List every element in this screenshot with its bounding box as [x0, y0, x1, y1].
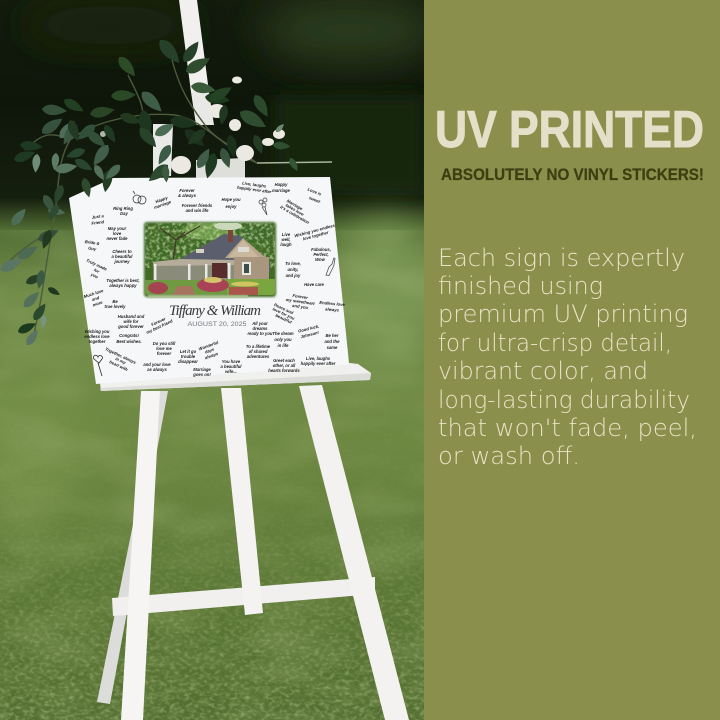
easel: upper mast and ledge behind the sign: [153, 0, 245, 178]
subheading: ABSOLUTELY NO VINYL STICKERS!: [441, 166, 704, 184]
handwritten guest notes: left side: Best wishes.: [116, 339, 142, 344]
handwritten guest notes: left side: good forever: [117, 324, 144, 329]
handwritten guest notes: left side: disappear: [178, 359, 198, 364]
handwritten guest notes: right side: All your: [251, 321, 268, 326]
handwritten guest notes: left side: Congrats!: [119, 333, 139, 338]
garland stems: [2, 60, 257, 338]
handwritten guest notes: right side: Wishing you endless: [294, 223, 336, 238]
handwritten guest notes: left side: Bride &: [84, 239, 100, 246]
handwritten guest notes: left side: Much love: [83, 288, 105, 299]
handwritten guest notes: right side: Wow: [315, 257, 326, 262]
handwritten guest notes: left side: never fade: [107, 236, 128, 241]
handwritten guest notes: left side: Let it go: [180, 349, 197, 354]
icon: heart key: [94, 355, 102, 376]
handwritten guest notes: right side: happily ever after: [237, 185, 272, 194]
handwritten guest notes: left side: my best friend: [145, 318, 174, 335]
handwritten guest notes: left side: and win life: [186, 208, 209, 213]
handwritten guest notes: left side: Marriage: [193, 367, 211, 372]
handwritten guest notes: right side: Forever: [292, 293, 309, 300]
handwritten guest notes: right side: only you: [274, 337, 292, 342]
body text: finished using: [438, 272, 603, 300]
white flowers: [100, 76, 285, 174]
greenery garland with white flowers: [0, 36, 332, 347]
handwritten guest notes: right side: [198, 180, 346, 374]
handwritten guest notes: left side: marriage: [153, 199, 172, 210]
handwritten guest notes: left side: as always: [147, 367, 167, 372]
handwritten guest notes: right side: Good luck,: [298, 324, 320, 334]
handwritten guest notes: right side: and you: [292, 303, 309, 310]
handwritten guest notes: right side: ready to you: [248, 331, 273, 336]
handwritten guest notes: right side: love for you: [272, 306, 296, 321]
handwritten guest notes: right side: Happy: [275, 182, 288, 187]
sign board: [69, 177, 359, 384]
handwritten guest notes: right side: Johnson!: [300, 330, 320, 339]
handwritten guest notes: right side: love together: [302, 230, 329, 241]
easel: centre leg: [221, 388, 263, 615]
handwritten guest notes: right side: To love,: [285, 261, 301, 266]
handwritten guest notes: right side: Wonderful: [198, 339, 220, 351]
handwritten guest notes: left side: Truly made: [85, 258, 108, 272]
handwritten guest notes: right side: laugh: [280, 242, 292, 247]
handwritten guest notes: left side: goes on!: [192, 372, 211, 377]
handwritten guest notes: right side: Hope you: [221, 197, 241, 202]
handwritten guest notes: right side: same: [327, 345, 338, 350]
handwritten guest notes: right side: marriage: [272, 188, 291, 193]
handwritten guest notes: left side: Day: [120, 211, 129, 216]
handwritten guest notes: right side: takes love: [285, 202, 305, 217]
body text: that won't fade, peel,: [438, 414, 697, 442]
handwritten guest notes: right side: beautiful: [275, 313, 293, 325]
handwritten guest notes: right side: Be her: [325, 333, 339, 338]
handwritten guest notes: left side: [83, 188, 213, 377]
handwritten guest notes: left side: endless love: [84, 334, 110, 339]
handwritten guest notes: left side: trouble: [181, 354, 196, 359]
handwritten guest notes: left side: you: [89, 271, 99, 280]
handwritten guest notes: left side: Forever: [150, 316, 167, 327]
handwritten guest notes: left side: Together, always: [104, 346, 138, 365]
handwritten guest notes: left side: in my: [115, 356, 127, 366]
panel: olive text column: [424, 0, 720, 720]
handwritten guest notes: right side: Peace and: [273, 302, 294, 315]
handwritten guest notes: left side: Happy: [155, 195, 169, 204]
handwritten guest notes: left side: Ring Ring: [113, 206, 133, 211]
handwritten guest notes: left side: wife for: [124, 319, 139, 324]
handwritten guest notes: right side: enjoy: [226, 204, 237, 209]
handwritten guest notes: left side: Together is best,: [106, 278, 140, 283]
easel: right leg: [299, 385, 409, 720]
handwritten guest notes: right side: days: [204, 346, 215, 355]
handwritten guest notes: right side: a beautiful: [221, 364, 242, 369]
handwritten guest notes: right side: Fabulous,: [311, 247, 331, 252]
body text: [438, 244, 697, 470]
handwritten guest notes: left side: Just a: [91, 213, 105, 220]
handwritten guest notes: left side: and your love: [143, 362, 171, 367]
easel: sign tray: [100, 364, 371, 391]
handwritten guest notes: right side: always: [204, 351, 219, 360]
handwritten guest notes: left side: May your: [108, 226, 127, 231]
handwritten guest notes: left side: Cheers to: [112, 249, 132, 254]
handwritten guest notes: right side: and joy: [286, 273, 301, 278]
handwritten guest notes: left side: heart with: [109, 359, 129, 372]
handwritten guest notes: left side: love: [113, 231, 122, 236]
handwritten guest notes: right side: Greet each: [273, 358, 295, 363]
handwritten guest notes: right side: Endless love: [319, 300, 346, 307]
icon: bouquet: [259, 198, 267, 215]
handwritten guest notes: left side: Forever: [179, 188, 195, 193]
handwritten guest notes: left side: together: [89, 339, 106, 344]
easel: crossbar: [112, 577, 375, 616]
handwritten guest notes: right side: my sweetheart: [285, 297, 316, 306]
handwritten guest notes: left side: forever: [157, 351, 171, 356]
handwritten guest notes: left side: Friend: [91, 219, 105, 226]
handwritten guest notes: left side: Be: [112, 299, 118, 304]
handwritten guest notes: right side: in life: [278, 343, 289, 348]
body text: long-lasting durability: [438, 386, 690, 414]
handwritten guest notes: right side: sweet: [308, 195, 321, 204]
handwritten guest notes: left side: always happy: [109, 283, 137, 288]
handwritten guest notes: right side: Live, laughs: [242, 180, 267, 189]
handwritten guest notes: right side: To a lifetime: [246, 344, 271, 349]
easel: front left leg: [121, 391, 160, 720]
handwritten guest notes: right side: of shared: [249, 349, 268, 354]
handwritten guest notes: right side: it's a celebration: [279, 204, 311, 225]
handwritten guest notes: right side: Have care: [304, 282, 325, 287]
icon: wedding rings: [133, 191, 146, 204]
photo of house on sign: [144, 222, 277, 298]
handwritten guest notes: right side: Perfect,: [313, 252, 329, 257]
handwritten guest notes: left side: a beautiful: [112, 254, 133, 259]
body text: or wash off.: [438, 442, 580, 470]
handwritten guest notes: left side: for: [93, 267, 101, 274]
photo background: blurred hedge and lawn: [0, 0, 440, 720]
handwritten guest notes: right side: happily ever after: [301, 361, 336, 366]
handwritten guest notes: left side: journey: [113, 259, 130, 264]
handwritten guest notes: right side: other, or all: [273, 363, 296, 368]
leaves: [0, 36, 300, 347]
handwritten guest notes: right side: always: [325, 306, 340, 313]
body text: for ultra-crisp detail,: [438, 329, 672, 357]
handwritten guest notes: right side: Live: [282, 232, 291, 237]
handwritten guest notes: left side: true lovely: [105, 304, 126, 309]
handwritten guest notes: left side: Guy: [88, 245, 97, 252]
handwritten guest notes: right side: Marriage: [286, 198, 304, 212]
handwritten guest notes: right side: unity,: [287, 267, 299, 272]
handwritten guest notes: left side: Forever friends: [182, 203, 213, 208]
handwritten guest notes: left side: more: [92, 299, 104, 308]
handwritten guest notes: right side: Love is: [307, 187, 323, 197]
handwritten guest notes: right side: The dream: [272, 331, 294, 336]
body text: Each sign is expertly: [438, 244, 685, 272]
wedding date: AUGUST 20, 2025: [188, 321, 247, 328]
handwritten guest notes: right side: adventures: [247, 354, 270, 359]
handwritten guest notes: right side: well,: [281, 237, 291, 242]
handwritten guest notes: right side: wife...: [225, 369, 237, 374]
couple name: Tiffany & William: [169, 303, 261, 319]
handwritten guest notes: left side: Do you still: [153, 341, 176, 346]
easel: rear left leg: [97, 391, 168, 704]
handwritten guest notes: left side: and: [91, 295, 100, 302]
handwritten guest notes: left side: Husband and: [118, 314, 145, 319]
icon: champagne bottle: [326, 258, 335, 276]
handwritten guest notes: right side: Live, laughs: [306, 356, 331, 361]
handwritten guest notes: left side: & always: [178, 193, 197, 198]
body text: vibrant color, and: [438, 357, 648, 385]
handwritten guest notes: left side: Wishing you: [85, 329, 110, 334]
handwritten guest notes: right side: You have: [222, 359, 241, 364]
handwritten guest notes: left side: love me: [156, 346, 172, 351]
body text: premium UV printing: [438, 300, 688, 328]
handwritten guest notes: right side: dreams: [253, 326, 268, 331]
handwritten guest notes: right side: hearts forwards: [268, 368, 300, 373]
handwritten guest notes: right side: and the: [325, 339, 340, 344]
